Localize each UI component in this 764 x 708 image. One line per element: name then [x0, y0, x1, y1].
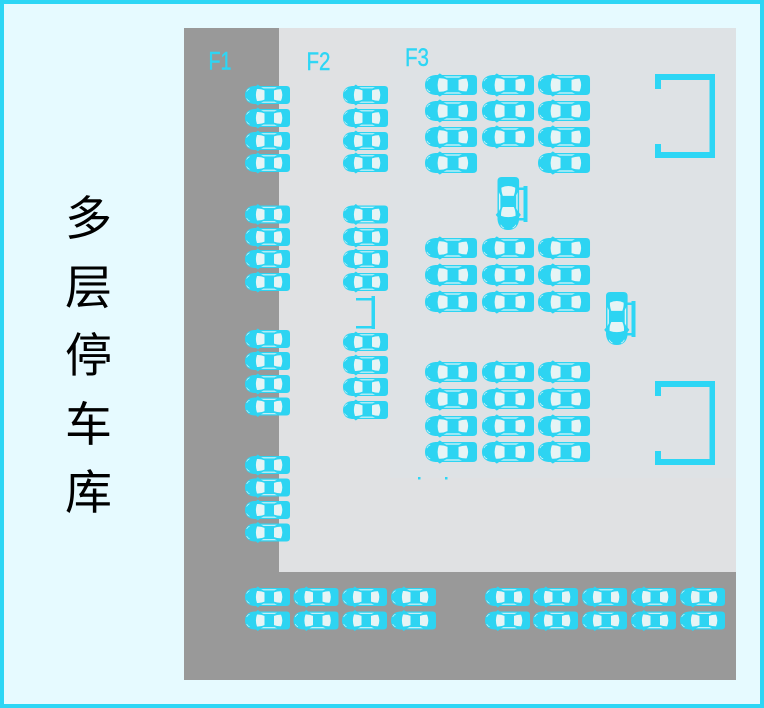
cars: F1 column — [245, 84, 290, 543]
cars: F3 lower block — [425, 360, 590, 464]
bracket: small ramp on F2 — [356, 296, 375, 329]
title: vertical heading: 车 — [65, 398, 112, 451]
cars: F3 middle block — [425, 236, 590, 314]
panel: floor F3 — [390, 28, 736, 478]
cars: F3 upper block — [425, 73, 590, 175]
title: vertical heading: 库 — [65, 466, 112, 519]
floor labels: F2 — [306, 48, 330, 76]
bracket: upper ramp — [655, 74, 715, 158]
moving car with barrier: lower — [604, 292, 636, 345]
floor labels: F1 — [208, 48, 232, 76]
moving car with barrier: upper — [496, 177, 528, 230]
panel: floor F1 — [184, 28, 736, 680]
cars: bottom row left — [245, 586, 436, 631]
title: vertical heading: 多 — [65, 192, 112, 245]
marker dots — [418, 477, 448, 480]
cars: bottom row right — [485, 586, 725, 631]
floor labels — [208, 44, 429, 76]
bracket: lower ramp — [655, 381, 715, 465]
title: vertical heading: 层 — [65, 261, 112, 314]
title: vertical heading: 停 — [65, 329, 112, 382]
panel: floor F2 — [279, 28, 736, 572]
floor labels: F3 — [405, 44, 429, 72]
title: vertical heading — [65, 192, 112, 519]
cars: F2 column — [343, 84, 388, 420]
